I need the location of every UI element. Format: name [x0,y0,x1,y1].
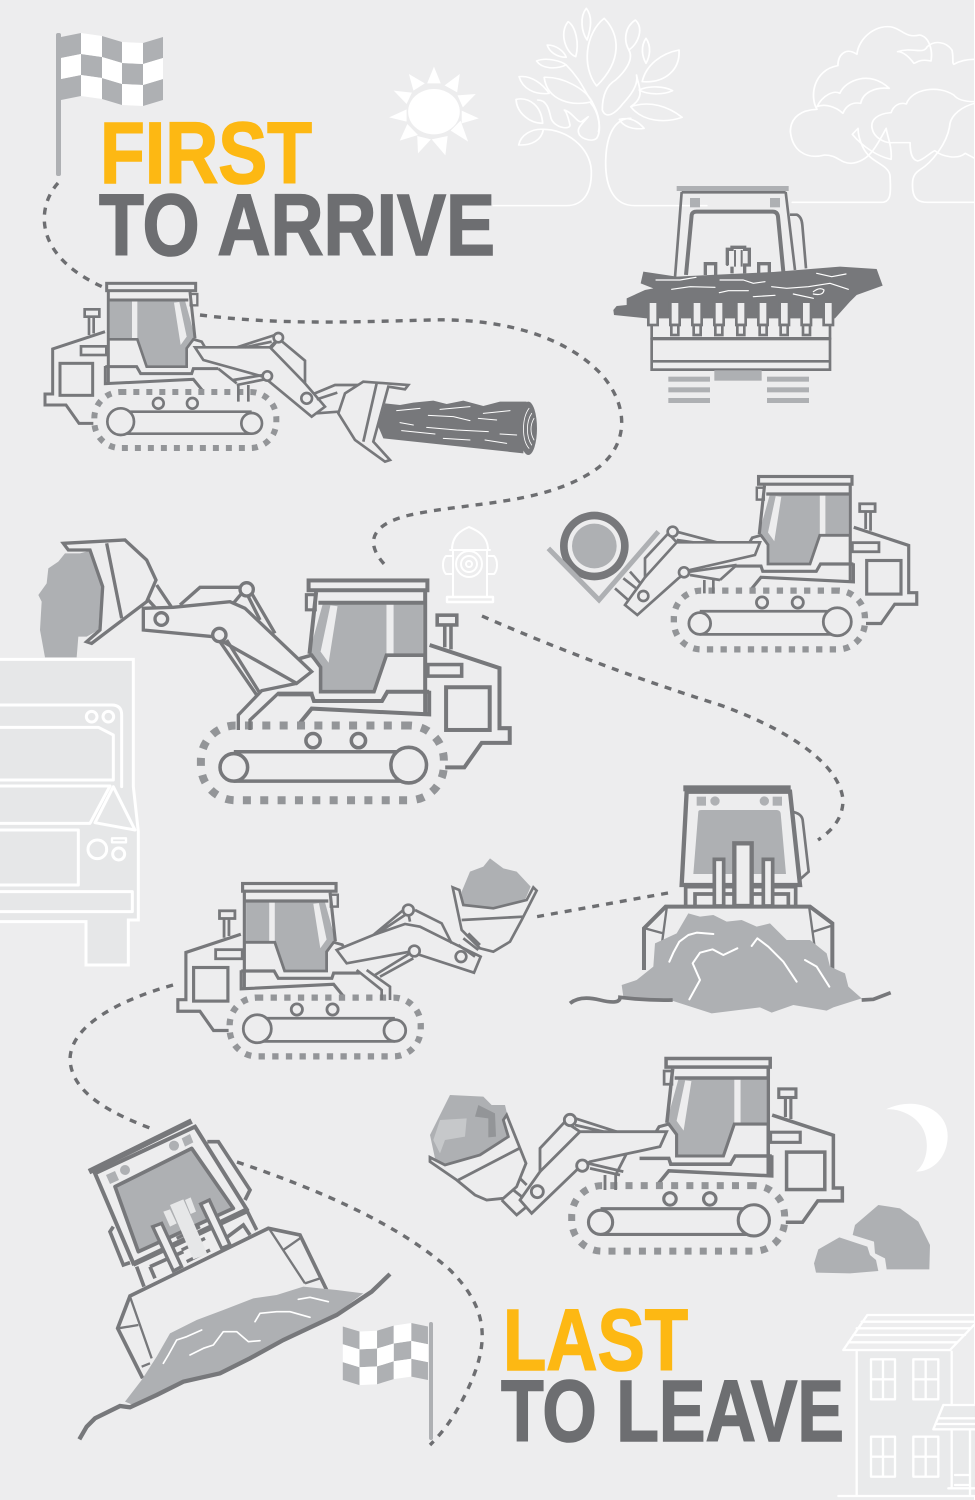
bucket [338,382,408,462]
loader body [572,1058,842,1251]
loader arm and bucket [337,887,537,1000]
rock [38,551,102,657]
title: first to arrive: TO ARRIVE [99,177,495,274]
icon: start flag [56,33,163,176]
icon: crescent moon [886,1104,948,1172]
blade [118,1228,327,1378]
icon: outline tree right [790,27,975,202]
ground slope [79,1274,390,1439]
title: last to leave: LAST [503,1292,688,1389]
debris [462,858,531,908]
front loader with log [45,283,537,462]
tracks [668,370,809,403]
bulldozer front view with log [613,186,883,403]
icon: sun [389,67,479,155]
debris cracks [669,933,829,999]
boulder [430,1095,508,1165]
handles [110,1142,250,1265]
loader with boulder [430,1058,842,1251]
dashed route [44,183,843,1445]
loader arm [195,333,363,417]
loader with bucket of debris [178,858,537,1056]
finish flag [343,1322,433,1440]
icon: rocks [814,1205,930,1273]
log [613,267,883,318]
teeth [648,302,833,335]
icon: outline tree left [493,8,707,206]
bulldozer on slope [79,1121,390,1439]
canopy [677,186,789,191]
debris pile [622,913,862,1013]
title: last to leave: TO LEAVE [501,1363,844,1460]
pipe [548,512,658,600]
loader body [674,476,917,649]
cab [95,1127,247,1263]
ground [570,993,891,1003]
blade [652,325,830,338]
icon: house [838,1315,975,1496]
loader body [178,883,421,1056]
debris on slope [125,1287,363,1405]
cab [682,792,800,885]
title: first to arrive [99,105,495,274]
icon: fire hydrant [443,527,497,602]
loader arm and bucket [430,1114,667,1215]
bulldozer pushing debris [570,785,891,1013]
loader arm [615,527,760,615]
title: last to leave [501,1292,844,1460]
large loader with raised bucket [38,540,510,800]
truck [0,659,138,965]
log [378,401,537,455]
loader with pipe [548,476,917,649]
title: first to arrive: FIRST [100,105,312,202]
loader body [45,283,276,448]
debris cracks [163,1297,328,1363]
loader arm and bucket [63,540,313,730]
loader body [201,580,510,800]
blade [644,907,832,970]
